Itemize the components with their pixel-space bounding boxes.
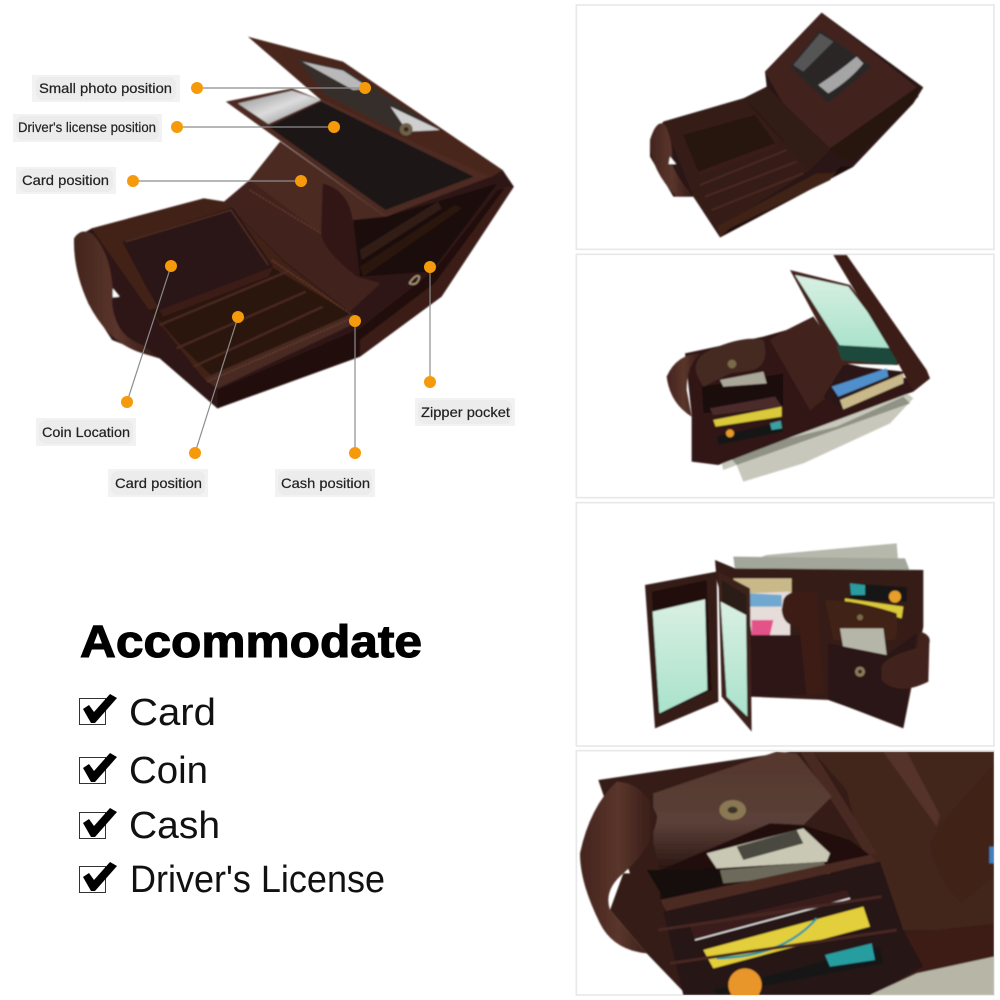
label: card position upper: Card position: [22, 172, 109, 188]
wallet photo 2: [667, 255, 930, 482]
checklist: [80, 692, 385, 901]
wallet photo 1: [650, 13, 923, 237]
wallet photo 4: [580, 752, 994, 1000]
item: Coin: [80, 750, 208, 792]
label: zipper pocket: Zipper pocket: [421, 404, 510, 420]
item: Coin: Coin: [129, 750, 208, 792]
label: zipper pocket: [415, 398, 515, 426]
label: small photo position: Small photo position: [39, 80, 172, 96]
label: coin location: Coin Location: [42, 424, 130, 440]
label: coin location: [36, 418, 136, 446]
item: Cash: Cash: [129, 805, 220, 847]
label: driver's license position: Driver's license position: [18, 119, 156, 135]
panel: wallet with cash and cards: [576, 254, 994, 498]
callout lines: [127, 88, 430, 453]
panel: wallet close-up: [576, 751, 994, 1000]
label: cash position: Cash position: [281, 475, 370, 491]
label: driver's license position: [13, 114, 162, 142]
label: cash position: [275, 469, 375, 497]
item: Driver's License: Driver's License: [130, 859, 385, 901]
panel: main annotated wallet: [13, 37, 515, 497]
heading: Accommodate: Accommodate: [80, 616, 422, 667]
label: card position lower: [108, 469, 208, 497]
panel: wallet front view unfolded: [576, 503, 994, 746]
wallet photo 3: [645, 543, 930, 732]
item: Cash: [80, 805, 220, 847]
callout dots: [121, 82, 436, 459]
label: card position upper: [16, 167, 116, 194]
item: Card: [80, 692, 216, 734]
label: small photo position: [32, 75, 180, 102]
wallet photo: open wallet: [74, 37, 514, 408]
label: card position lower: Card position: [115, 475, 202, 491]
item: Card: Card: [129, 692, 216, 734]
panel: wallet open, empty: [576, 5, 994, 249]
